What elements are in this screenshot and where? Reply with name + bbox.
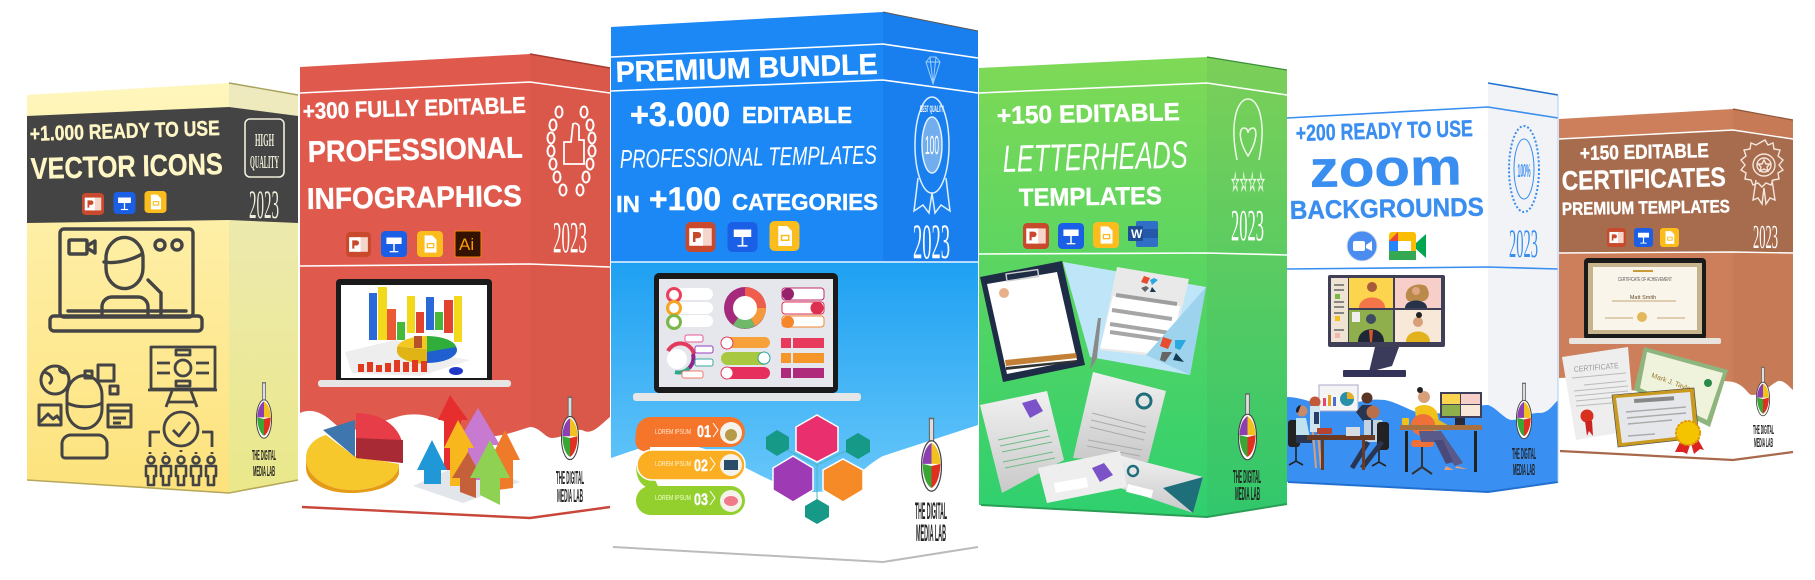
dark title band bbox=[1559, 130, 1793, 253]
stamp: high quality bbox=[245, 119, 284, 177]
document: white certificate bbox=[1562, 347, 1635, 440]
logo: digital media lab bbox=[556, 397, 584, 506]
heading: editable: +150 EDITABLE bbox=[997, 98, 1180, 130]
heading: editable: +150 EDITABLE bbox=[1580, 140, 1709, 165]
panel: letterheads box: ☆☆☆☆ bbox=[1231, 167, 1265, 197]
text: THE DIGITAL bbox=[1512, 446, 1536, 463]
list: lorem ipsum options: 02 bbox=[694, 456, 708, 475]
logo: digital media lab bbox=[915, 418, 947, 547]
document: middle letterhead bbox=[1073, 372, 1166, 462]
heading: professional: PROFESSIONAL bbox=[307, 132, 523, 169]
list: lorem ipsum options: LOREM IPSUM bbox=[655, 429, 691, 436]
icon row: apps bbox=[1023, 221, 1158, 249]
icon row: apps bbox=[346, 231, 481, 257]
badge: best quality bbox=[914, 97, 950, 213]
panel: letterheads box bbox=[979, 57, 1287, 517]
stamp: 100 percent bbox=[1509, 126, 1539, 212]
document: envelopes bbox=[1038, 451, 1203, 513]
icon: diamond bbox=[926, 57, 940, 84]
panel: letterheads box: 2023 bbox=[1231, 201, 1264, 250]
heading: infographics: INFOGRAPHICS bbox=[307, 180, 522, 216]
logo: digital media lab bbox=[1753, 367, 1774, 450]
panel: certificates box bbox=[1559, 109, 1793, 460]
heading: categories: IN bbox=[616, 191, 640, 217]
document: folder bbox=[1063, 262, 1206, 375]
icon: video call laptop bbox=[50, 229, 202, 331]
icon: pen bbox=[1090, 318, 1101, 370]
list: lorem ipsum options: 03 bbox=[694, 490, 708, 509]
chart: 3D pie bbox=[306, 413, 403, 493]
icon: gold seal bbox=[1675, 421, 1704, 454]
laptop: certificate screen bbox=[1569, 258, 1721, 344]
heading: templates count: EDITABLE bbox=[742, 102, 852, 128]
panel: letterheads box: MEDIA LAB bbox=[1235, 484, 1260, 504]
laptop: certificate screen: CERTIFICATE OF ACHIEVEMENT bbox=[1618, 277, 1672, 283]
text: THE DIGITAL bbox=[915, 498, 947, 525]
icon row: apps bbox=[1607, 228, 1679, 247]
badge: best quality: 100 bbox=[925, 130, 939, 160]
list: lorem ipsum options bbox=[635, 417, 745, 515]
panel: vector icons box: MEDIA LAB bbox=[253, 463, 275, 480]
icon row: apps bbox=[686, 221, 800, 252]
list: lorem ipsum options: 01 bbox=[697, 422, 711, 441]
logo: digital media lab bbox=[1512, 383, 1536, 479]
panel: professional infographics box: 2023 bbox=[553, 213, 587, 262]
panel: zoom backgrounds box bbox=[1287, 83, 1558, 492]
chart: hexagon cluster bbox=[766, 415, 870, 524]
badge: heart with stars bbox=[1231, 99, 1265, 197]
laptop: infographic screen bbox=[633, 273, 861, 401]
panel: professional infographics box bbox=[300, 54, 610, 518]
blue wave footer bbox=[1287, 397, 1558, 492]
panel: professional infographics box: MEDIA LAB bbox=[557, 486, 583, 506]
icon: zoom app bbox=[1347, 231, 1377, 261]
document: green certificate bbox=[1634, 347, 1728, 427]
icon: team check bbox=[146, 412, 216, 485]
heading: certificates: CERTIFICATES bbox=[1561, 162, 1726, 196]
sky gradient lower section bbox=[611, 262, 978, 562]
stamp: high quality: HIGH bbox=[255, 130, 274, 150]
heading: zoom wordmark: zoom bbox=[1309, 138, 1462, 199]
text: THE DIGITAL bbox=[556, 468, 584, 488]
panel: premium bundle box bbox=[611, 12, 978, 562]
logo: digital media lab bbox=[252, 382, 276, 480]
list: lorem ipsum options: LOREM IPSUM bbox=[655, 495, 691, 502]
white wave footer bbox=[300, 411, 610, 518]
heading: templates: TEMPLATES bbox=[1019, 182, 1162, 212]
badge: laurel thumbs up bbox=[548, 106, 596, 196]
panel: zoom backgrounds box: MEDIA LAB bbox=[1513, 462, 1535, 479]
text: THE DIGITAL bbox=[252, 447, 276, 464]
icon row: apps: W bbox=[1131, 227, 1143, 241]
dark title band bbox=[27, 107, 298, 223]
heading: fully editable: +300 FULLY EDITABLE bbox=[302, 92, 526, 124]
heading: professional templates: PROFESSIONAL TEMPLATES bbox=[620, 140, 878, 174]
document: clipboard bbox=[980, 261, 1085, 382]
illustration: team meeting bbox=[1288, 385, 1389, 470]
heading: vector icons: VECTOR ICONS bbox=[30, 148, 223, 186]
heading: templates count: +3.000 bbox=[630, 96, 730, 134]
text: MEDIA LAB bbox=[916, 520, 946, 547]
document: white certificate: CERTIFICATE bbox=[1573, 361, 1619, 374]
panel: vector icons box: QUALITY bbox=[250, 152, 279, 172]
heading: premium templates: PREMIUM TEMPLATES bbox=[1562, 196, 1730, 219]
chart: 3D arrows bbox=[413, 395, 520, 505]
panel: zoom backgrounds box: 100% bbox=[1518, 161, 1530, 181]
heading: ready to use: +200 READY TO USE bbox=[1295, 115, 1473, 146]
heading: premium bundle: PREMIUM BUNDLE bbox=[615, 49, 878, 89]
logo: digital media lab bbox=[1233, 393, 1261, 504]
document: gold framed certificate bbox=[1612, 388, 1699, 447]
text: THE DIGITAL bbox=[1233, 467, 1261, 487]
illustration: remote worker bbox=[1400, 387, 1482, 474]
icon: presentation board bbox=[148, 347, 217, 407]
monitor: video call grid bbox=[1328, 275, 1445, 377]
icon row: apps bbox=[82, 191, 166, 215]
heading: categories bbox=[616, 181, 878, 217]
white wave footer bbox=[1559, 378, 1793, 460]
panel: premium bundle box: 2023 bbox=[913, 213, 950, 269]
heading: backgrounds: BACKGROUNDS bbox=[1290, 192, 1484, 225]
laptop: bar chart screen bbox=[318, 279, 511, 387]
panel: zoom backgrounds box: 2023 bbox=[1509, 221, 1538, 266]
badge: award rosette bbox=[1741, 140, 1783, 204]
list: lorem ipsum options: LOREM IPSUM bbox=[655, 461, 691, 468]
heading: categories: +100 bbox=[649, 181, 721, 217]
heading: letterheads: LETTERHEADS bbox=[1002, 134, 1188, 181]
icon: google meet bbox=[1389, 232, 1426, 260]
white wave footer bbox=[611, 425, 978, 562]
document: green certificate: Mark J. Taylor bbox=[1650, 372, 1694, 394]
heading: ready to use: +1.000 READY TO USE bbox=[29, 117, 220, 146]
panel: premium bundle box: BEST QUALITY bbox=[920, 104, 944, 114]
heading: categories: CATEGORIES bbox=[732, 189, 878, 215]
panel: vector icons box: 2023 bbox=[249, 182, 279, 227]
laptop: certificate screen: Matt Smith bbox=[1630, 295, 1656, 301]
icon row: apps: Ai bbox=[459, 235, 474, 254]
icon: person with media bbox=[39, 365, 131, 458]
document: left letterhead bbox=[980, 391, 1064, 493]
chart board bbox=[1319, 385, 1358, 411]
heading: templates count bbox=[630, 96, 852, 134]
panel: vector icons box bbox=[27, 83, 298, 493]
